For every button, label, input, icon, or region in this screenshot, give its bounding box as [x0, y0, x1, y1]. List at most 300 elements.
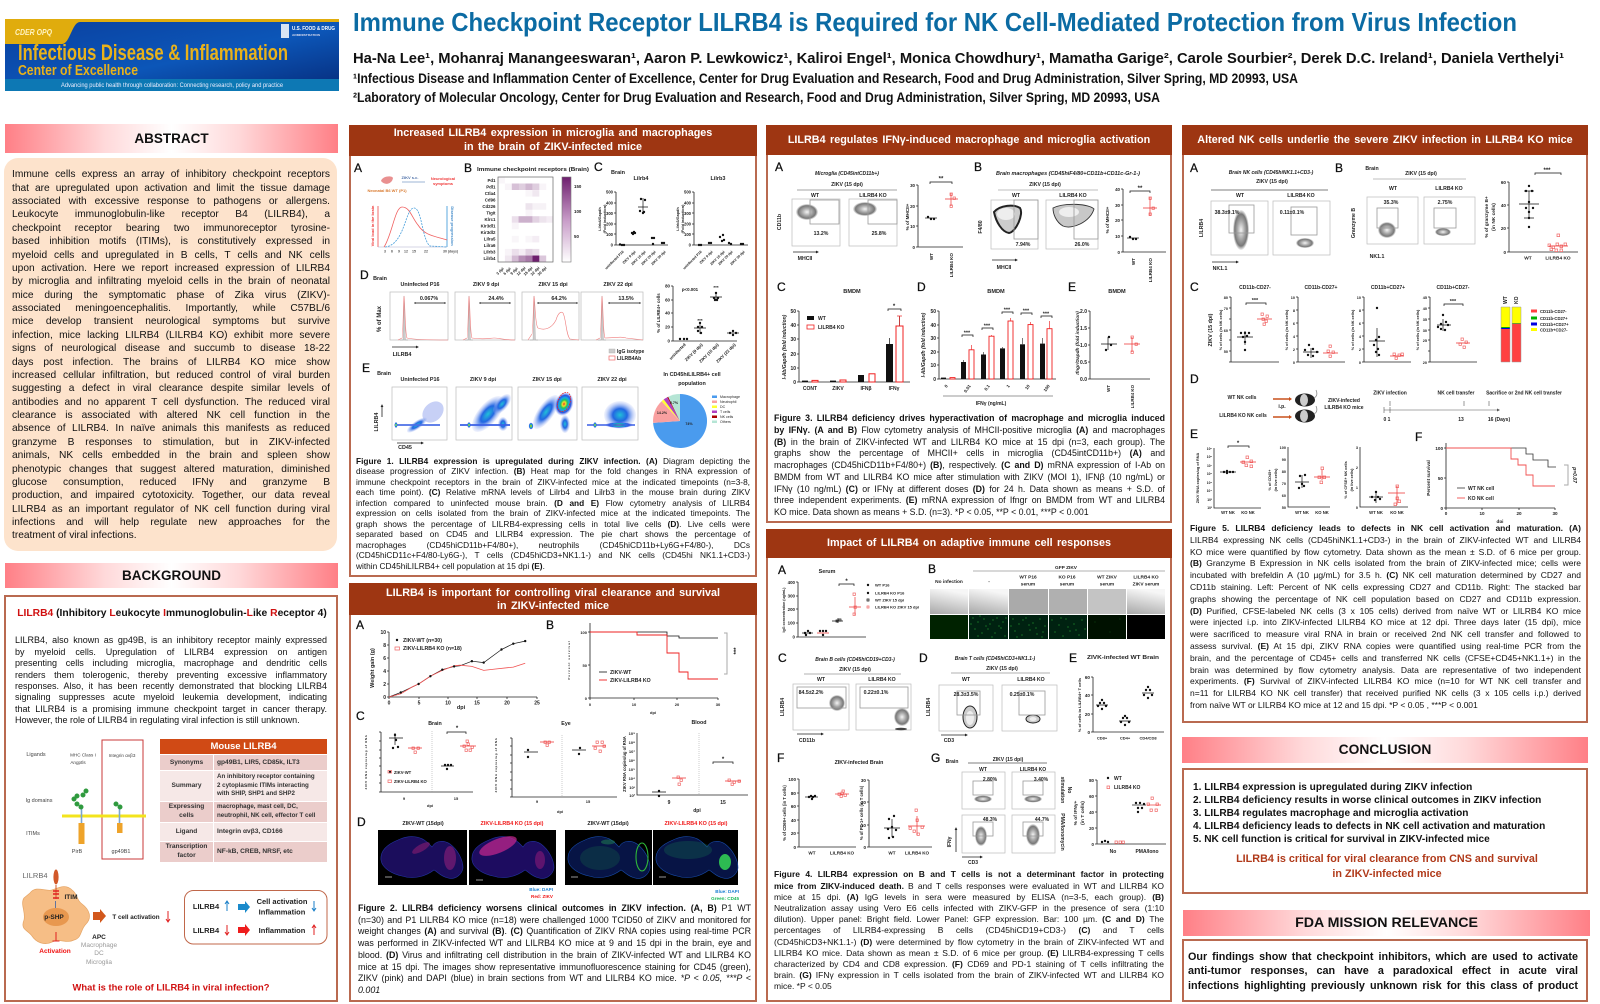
- F: CD69 and PD-1 scatter plots: 0: [863, 845, 866, 850]
- E: CD45 vs LILRB4 density plots: CD45: [398, 445, 412, 451]
- A: microglia flow plots and scatter: [775, 160, 963, 277]
- A: serum IgG scatter: *: [845, 579, 848, 585]
- B: neutralization microscopy grid: [928, 562, 1165, 639]
- C: NK subset scatter plots and stacked bars: 20: [1423, 361, 1427, 365]
- D: brain T cell flow plots: WT: [962, 677, 971, 683]
- C: brain B cell flow plots: WT: [817, 677, 826, 683]
- C: NK subset scatter plots and stacked bars: 0: [1359, 361, 1361, 365]
- receptor structure diagram: Ig domains: [26, 798, 53, 804]
- B: survival curve: Percent survival: [567, 640, 571, 680]
- A: weight gain line chart: Weight gain (g): [370, 648, 376, 688]
- text block: background paragraph: LILRB4, also known as gp49B, is an inhibitory receptor mainly expressed: [15, 635, 327, 645]
- callout: key conclusion: LILRB4 is critical for viral clearance from CNS and survival: [1236, 852, 1538, 864]
- text block: abstract: granzyme B responses to stimulation, but in ZIKV-infected: [12, 437, 330, 448]
- G: IFN gamma flow plots and scatter: 3.40%: [1034, 777, 1049, 783]
- C: brain B cell flow plots: CD11b: [799, 738, 815, 744]
- E: Ifngr scatter: 1.5: [1080, 326, 1087, 332]
- figure 2 charts: [356, 618, 748, 901]
- C: ZIKV RNA scatter plots: 9: [536, 799, 539, 804]
- caption: figure 4: percentages of LILRB4-expressing B cells (CD45hiCD19+CD3-) (C) and T cells: [774, 925, 1164, 935]
- heading: FDA mission relevance: FDA MISSION RELEVANCE: [1295, 915, 1478, 931]
- E: viral RNA and transferred cell scatter plots: % of CD45+: [1268, 469, 1272, 490]
- B: brain macrophage flow plots and scatter: % of MHCII+: [1105, 206, 1110, 233]
- D: immunofluorescence brain sections: [357, 815, 739, 901]
- B: survival curve: 20: [675, 702, 680, 707]
- C: Lilrb4 and Lilrb3 mRNA charts: ZIKV 30 dpi: [729, 250, 746, 266]
- C: NK subset scatter plots and stacked bars: % of cells (in NK cells): [1285, 309, 1289, 350]
- D: percent LILRB4 positive scatter: p<0.001: [682, 287, 699, 292]
- A: weight gain line chart: A: [356, 618, 364, 632]
- B: heat map: Kir3dl1: [481, 224, 496, 228]
- caption: figure 5: were injected i.p. into ZIKV-infected LILRB4 KO mice at 12 dpi. Three days later (15 dpi), mice: [1190, 617, 1581, 627]
- text block: abstract: associated meningoencephalitis. Importantly, while C57BL/6: [12, 303, 330, 314]
- heading: figure 2 panel: in ZIKV-infected mice: [497, 600, 609, 612]
- C: NK subset scatter plots and stacked bars: 6: [1359, 322, 1361, 326]
- C: BMDM bar chart: ZIKV: [832, 386, 844, 392]
- D: IFN gamma dose bar chart: ***: [964, 330, 971, 336]
- B: heat map: Klrc1: [485, 217, 496, 222]
- C: BMDM bar chart: *: [893, 304, 896, 310]
- E: viral RNA and transferred cell scatter plots: (in live cells): [1350, 468, 1354, 491]
- APC signalling diagram: Activation: [39, 948, 71, 955]
- C: brain B cell flow plots: ZIKV (15 dpi): [839, 667, 871, 673]
- E: viral RNA and transferred cell scatter plots: WT NK: [1369, 510, 1383, 515]
- G: IFN gamma flow plots and scatter: 48.3%: [983, 817, 998, 823]
- caption: figure 4: characterized by CD4 and CD8 expression. (F) CD69 and PD-1 staining of T cells infiltrating the: [774, 959, 1164, 969]
- text block: abstract: checkpoint receptor bearing two immunoreceptor tyrosine-: [12, 223, 330, 234]
- B: heat map: 22 dpi: [530, 266, 541, 277]
- A: microglia flow plots and scatter: 20: [910, 204, 916, 209]
- E: viral RNA and transferred cell scatter plots: *: [1237, 441, 1240, 447]
- caption: figure 1: macrophages (CD45hiCD11b+F4/80+), neutrophils (CD45hiCD11b+Ly6G+F4/80-), DCs: [356, 540, 750, 550]
- D: NK transfer schematic and timeline: D: [1190, 372, 1199, 386]
- C: Lilrb4 and Lilrb3 mRNA charts: 300: [684, 211, 692, 216]
- E: viral RNA and transferred cell scatter plots: 10⁸: [1207, 455, 1212, 459]
- F: CD69 and PD-1 scatter plots: WT: [808, 850, 816, 856]
- heading: conclusion: [1182, 737, 1588, 763]
- caption: figure 2: blood. (D) Virus and infiltrating cell distribution in the brain of ZIKV-infected WT and LILRB4 KO: [358, 950, 751, 960]
- B: neutralization microscopy grid: WT ZIKV: [1097, 574, 1118, 580]
- B: heat map: Immune checkpoint receptors (Brain): [477, 167, 589, 173]
- text block: abstract: mice develop transient neurological symptoms but survive: [12, 316, 330, 327]
- E: T cell subset scatter: CD4/CD8: [1139, 736, 1157, 740]
- C: NK subset scatter plots and stacked bars: 8: [1359, 309, 1361, 313]
- D: brain T cell flow plots: ZIKV (15 dpi): [986, 666, 1018, 672]
- C: BMDM bar chart: 20: [790, 352, 796, 358]
- B: granzyme B flow plots and scatter: WT: [1524, 256, 1532, 262]
- A: serum IgG scatter: 400: [788, 580, 796, 585]
- panel: figure 3 IFN gamma activation: [766, 125, 1172, 523]
- C: Lilrb4 and Lilrb3 mRNA charts: ZIKV 20 dpi: [640, 250, 657, 266]
- E: T cell subset scatter: E: [1069, 651, 1077, 665]
- C: NK subset scatter plots and stacked bars: 40: [1423, 307, 1427, 311]
- G: IFN gamma flow plots and scatter: 2.80%: [983, 777, 998, 783]
- caption: figure 3: by IFNγ. (A and B) Flow cytometry analysis of MHCII-positive microglia (A) and macrophages: [774, 425, 1165, 435]
- text block: background paragraph: renders them tolerogenic, thereby preventing excessive inflammatory: [15, 670, 327, 680]
- E: viral RNA and transferred cell scatter plots: KO NK: [1390, 510, 1404, 515]
- B: survival curve: 0: [585, 696, 588, 701]
- C: NK subset scatter plots and stacked bars: CD11b-CD27-: [1540, 309, 1567, 314]
- APC signalling diagram: p-SHP: [44, 914, 64, 921]
- caption: figure 2: was performed in ZIKV-infected WT and LILRB4 KO mice at 9 and 15 dpi in the brain, eye and: [358, 938, 751, 948]
- G: IFN gamma flow plots and scatter: 44.7%: [1035, 817, 1050, 823]
- C: ZIKV RNA scatter plots: 15: [586, 799, 591, 804]
- C: ZIKV RNA scatter plots: C: [356, 709, 365, 723]
- text block: FDA relevance: Our findings show that checkpoint inhibitors, which are used to activate: [1188, 950, 1578, 962]
- C: NK subset scatter plots and stacked bars: 4: [1359, 335, 1362, 339]
- A: microglia flow plots and scatter: MHCII: [798, 256, 813, 262]
- D: percent LILRB4 positive scatter: 40: [665, 310, 671, 316]
- D: IFN gamma dose bar chart: I-Ab/Gapdh (fold induction): [921, 312, 927, 377]
- C: Lilrb4 and Lilrb3 mRNA charts: 200: [606, 222, 614, 226]
- C: BMDM bar chart: 40: [790, 323, 796, 329]
- caption: figure 1: expression on cells isolated from the brain of ZIKV-infected mice at the indicated timepoints. The: [356, 508, 750, 518]
- C: NK subset scatter plots and stacked bars: 10: [1291, 296, 1295, 300]
- C: Lilrb4 and Lilrb3 mRNA charts: ZIKV 15 dpi: [709, 250, 726, 266]
- B: heat map: Ctla4: [485, 191, 496, 196]
- text block: abstract: treatment of viral infections.: [12, 530, 137, 541]
- caption: figure 4: dilution). Upper panel: Bright field. Lower Panel: GFP expression. Bar: 100 µm. (C and D) The: [774, 914, 1164, 924]
- table: mouse LILRB4: Transcription: [166, 843, 207, 850]
- C: NK subset scatter plots and stacked bars: CD11b-CD27+: [1540, 316, 1568, 321]
- A: NK LILRB4 flow plots: A: [1190, 161, 1198, 175]
- E: pie chart of cell population: Others: [720, 420, 731, 424]
- D: NK transfer schematic and timeline: 16 (Days): [1488, 417, 1510, 423]
- G: IFN gamma flow plots and scatter: WT: [1114, 776, 1122, 782]
- F: CD69 and PD-1 scatter plots: 20: [861, 800, 866, 805]
- F: CD69 and PD-1 scatter plots: 20: [791, 831, 796, 836]
- caption: figure 1: within CD45hiLILRB4+ cell population at 15 dpi (E).: [356, 561, 545, 571]
- C: Lilrb4 and Lilrb3 mRNA charts: ZIKV 30 dpi: [650, 250, 667, 266]
- D: NK transfer schematic and timeline: WT NK cells: [1228, 395, 1257, 401]
- D: percent LILRB4 positive scatter: ZIKV (9 dpi): [684, 342, 704, 362]
- caption: figure 2: 0.001: [358, 985, 380, 995]
- B: survival curve: 100: [580, 630, 588, 635]
- C: ZIKV RNA scatter plots: Blood: [691, 720, 707, 726]
- B: brain macrophage flow plots and scatter: 0: [1118, 250, 1121, 255]
- B: heat map: 30 dpi: [537, 266, 548, 277]
- A: microglia flow plots and scatter: 25.8%: [872, 231, 887, 237]
- E: CD45 vs LILRB4 density plots: Uninfected P16: [401, 377, 439, 383]
- G: IFN gamma flow plots and scatter: G: [931, 751, 940, 765]
- B: granzyme B flow plots and scatter: 20: [1501, 226, 1506, 231]
- B: neutralization microscopy grid: GFP ZIKV: [1055, 565, 1078, 571]
- E: CD45 vs LILRB4 density plots: ZIKV 22 dpi: [597, 377, 627, 383]
- A: disease progression diagram: A: [354, 161, 362, 175]
- G: IFN gamma flow plots and scatter: (in T cells): [1080, 801, 1086, 825]
- D: immunofluorescence brain sections: ZIKV-WT (15dpi): [587, 821, 629, 827]
- C: ZIKV RNA scatter plots: Eye: [561, 721, 571, 727]
- caption: figure 4: (CD45hiCD3+NK1.1-) (D) were determined by flow cytometry in the brain of ZIKV-infected WT and: [774, 937, 1164, 947]
- C: Lilrb4 and Lilrb3 mRNA charts: 0: [689, 242, 692, 248]
- B: survival curve: ZIKV-WT: [610, 670, 632, 676]
- B: granzyme B flow plots and scatter: B: [1335, 161, 1343, 175]
- D: percent LILRB4 positive scatter: ZIKV (15 dpi): [698, 342, 720, 364]
- table: mouse LILRB4: cells: [179, 812, 194, 819]
- G: IFN gamma flow plots and scatter: 20: [1089, 826, 1095, 831]
- affiliation 1: ¹Infectious Disease and Inflammation Center of Excellence, Center for Drug Evaluation and Research, Food and Drug Administration, Silver Spring, MD 20993, USA: [353, 70, 1298, 86]
- A: disease progression diagram: [354, 161, 458, 254]
- D: percent LILRB4 positive scatter: uninfected: [668, 342, 687, 361]
- G: IFN gamma flow plots and scatter: IFNγ: [947, 836, 953, 847]
- E: pie chart of cell population: 74%: [685, 422, 693, 426]
- caption: figure 2: (n=30) and P1 LILRB4 KO mice (n=18) were challenged 1000 TCID50 of ZIKV and monitored for: [358, 915, 751, 925]
- E: Ifngr scatter: LILRB4 KO: [1130, 384, 1135, 408]
- text block: FDA relevance: infections highlighting previously unknown risk for this class of product: [1188, 980, 1578, 992]
- E: viral RNA and transferred cell scatter plots: 70: [1282, 482, 1286, 486]
- diagrams: receptor structure and signalling: [22, 740, 328, 992]
- F: CD69 and PD-1 scatter plots: 40: [791, 818, 796, 823]
- A: microglia flow plots and scatter: 13.2%: [814, 231, 829, 237]
- caption: figure 5: experiments. (F) Survival of ZIKV-infected LILRB4 KO mice (n=10 for WT NK cell transfer and: [1190, 676, 1581, 686]
- A: microglia flow plots and scatter: CD11b: [777, 214, 783, 230]
- B: heat map: Lilrb3: [484, 250, 496, 254]
- D: IFN gamma dose bar chart: 1: [1005, 383, 1011, 389]
- A: NK LILRB4 flow plots: 38.3±9.1%: [1215, 210, 1240, 216]
- receptor structure diagram: MHC Class I: [70, 752, 96, 758]
- C: NK subset scatter plots and stacked bars: 4: [1293, 335, 1296, 339]
- E: viral RNA and transferred cell scatter plots: [1190, 427, 1408, 515]
- C: Lilrb4 and Lilrb3 mRNA charts: ZIKV 20 dpi: [717, 250, 734, 266]
- G: IFN gamma flow plots and scatter: PMA/Ionomycin: [1059, 813, 1065, 851]
- A: microglia flow plots and scatter: 10: [910, 224, 916, 229]
- caption: figure 2: Figure 2. LILRB4 deficiency worsens clinical outcomes in ZIKV infection. (A, B) P1 WT: [358, 903, 751, 913]
- D: NK transfer schematic and timeline: Sacrifice or 2nd NK cell transfer: [1486, 390, 1562, 396]
- B: heat map: Pd1: [487, 178, 496, 183]
- D: LILRB4 histograms: ZIKV 15 dpi: [538, 282, 568, 288]
- E: pie chart of cell population: DC: [720, 405, 726, 409]
- caption: figure 5: from naïve WT or LILRB4 KO mice at 12 and 15 dpi. *P < 0.05 , ***P < 0.001: [1190, 700, 1478, 710]
- text block: abstract: signs of neurological disease and succumb to disease 18-22: [12, 343, 330, 354]
- D: immunofluorescence brain sections: ZIKV-LILRB4 KO (15 dpi): [481, 821, 544, 827]
- table: mouse LILRB4: macrophage, mast cell, DC,: [217, 803, 298, 810]
- C: BMDM bar chart: 50: [790, 309, 796, 315]
- B: brain macrophage flow plots and scatter: 7.94%: [1016, 242, 1031, 248]
- text block: FDA relevance: [1188, 950, 1578, 992]
- G: IFN gamma flow plots and scatter: PMA/Iono: [1135, 849, 1159, 855]
- G: IFN gamma flow plots and scatter: CD3: [968, 860, 978, 866]
- B: survival curve: 10: [632, 702, 637, 707]
- D: NK transfer schematic and timeline: LILRB4 KO NK cells: [1219, 413, 1267, 419]
- B: granzyme B flow plots and scatter: LILRB4 KO: [1435, 186, 1463, 192]
- E: CD45 vs LILRB4 density plots: E: [362, 361, 370, 375]
- receptor structure diagram: [26, 740, 146, 859]
- E: CD45 vs LILRB4 density plots: LILRB4: [374, 413, 380, 431]
- B: survival curve: dpi: [650, 710, 656, 715]
- A: weight gain line chart: 25: [534, 700, 540, 706]
- text block: abstract: mice during the symptomatic phase of Zika virus (ZIKV)-: [12, 290, 330, 301]
- A: weight gain line chart: 0: [388, 700, 391, 706]
- D: percent LILRB4 positive scatter: ZIKV (22 dpi): [715, 342, 737, 364]
- E: viral RNA and transferred cell scatter plots: 10⁵: [1207, 481, 1212, 485]
- C: NK subset scatter plots and stacked bars: 45: [1423, 296, 1427, 300]
- C: NK subset scatter plots and stacked bars: ***: [1252, 298, 1259, 304]
- text block: abstract: infection, mice lacking LILRB4 (LILRB4 KO) exhibit more severe: [12, 330, 330, 341]
- C: NK subset scatter plots and stacked bars: KO: [1514, 296, 1520, 304]
- F: NK transfer survival curve: 50: [1438, 476, 1443, 481]
- table: mouse LILRB4: gp49B1, LIR5, CD85k, ILT3: [217, 759, 300, 766]
- C: ZIKV RNA scatter plots: ZIKV RNA copies/ug of RNA: [622, 736, 627, 792]
- C: NK subset scatter plots and stacked bars: 60: [1224, 329, 1228, 333]
- APC signalling diagram: LILRB4: [22, 871, 48, 880]
- E: viral RNA and transferred cell scatter plots: KO NK: [1241, 510, 1255, 515]
- APC signalling diagram: DC: [94, 950, 104, 957]
- A: weight gain line chart: 20: [504, 700, 510, 706]
- D: IFN gamma dose bar chart: IFNγ (ng/mL): [976, 401, 1007, 407]
- C: NK subset scatter plots and stacked bars: 10: [1357, 296, 1361, 300]
- C: BMDM bar chart: IFNβ: [860, 386, 872, 392]
- A: serum IgG scatter: Serum: [819, 569, 836, 575]
- C: Lilrb4 and Lilrb3 mRNA charts: uninfected P16: [682, 250, 703, 270]
- E: Ifngr scatter: 2.0: [1080, 309, 1087, 315]
- text block: abstract: associated with excessive response to pathogens or allergens.: [12, 196, 330, 207]
- A: weight gain line chart: ZIKV-WT (n=30): [403, 638, 442, 644]
- C: ZIKV RNA scatter plots: [356, 709, 748, 814]
- authors: Ha-Na Lee¹, Mohanraj Manangeeswaran¹, Aaron P. Lewkowicz¹, Kaliroi Engel¹, Monica Chowdhury¹, Mamatha Garige², Carole Sourbier², Derek D.C. Ireland¹, Daniela Verthelyi¹: [353, 51, 1564, 67]
- F: CD69 and PD-1 scatter plots: LILRB4 KO: [905, 850, 930, 856]
- caption: figure 5: assess survival. (E) At 15 dpi, ZIKV RNA copies were quantified using real-time PCR from the: [1190, 641, 1581, 651]
- F: CD69 and PD-1 scatter plots: 10: [861, 823, 866, 828]
- D: NK transfer schematic and timeline: LILRB4 KO mice: [1324, 405, 1364, 411]
- A: weight gain line chart: 10: [380, 630, 386, 636]
- text block: abstract: phenotypic changes that suggest altered maturation, diminished: [12, 464, 330, 475]
- C: NK subset scatter plots and stacked bars: 80: [1224, 296, 1228, 300]
- text block: abstract: animals, NK cells embedded in the brain and spleen show: [12, 450, 330, 461]
- F: CD69 and PD-1 scatter plots: LILRB4 KO: [830, 850, 855, 856]
- heading: abstract: [5, 124, 338, 153]
- heading: figure 5 panel: Altered NK cells underlie the severe ZIKV infection in LILRB4 KO mice: [1197, 134, 1573, 146]
- A: serum IgG scatter: WT P16: [875, 582, 890, 588]
- D: IFN gamma dose bar chart: 50: [930, 309, 936, 315]
- text block: background paragraph: responses. Also, it has been recently demonstrated that blocking LILRB4: [15, 681, 327, 691]
- C: NK subset scatter plots and stacked bars: % of cells (in NK cells): [1219, 309, 1223, 350]
- G: IFN gamma flow plots and scatter: stimulation: [1059, 777, 1065, 803]
- A: weight gain line chart: 10: [445, 700, 451, 706]
- B: brain macrophage flow plots and scatter: 40: [1115, 187, 1121, 192]
- C: Lilrb4 and Lilrb3 mRNA charts: Lilrb3: [711, 176, 725, 182]
- E: T cell subset scatter: CD8+: [1097, 736, 1108, 740]
- C: ZIKV RNA scatter plots: dpi: [427, 803, 433, 808]
- A: serum IgG scatter: 200: [788, 607, 796, 612]
- APC signalling diagram: T cell activation: [112, 914, 160, 921]
- C: Lilrb4 and Lilrb3 mRNA charts: Lilrb4/Gapdh: [598, 207, 602, 231]
- C: NK subset scatter plots and stacked bars: CD11b+CD27+: [1540, 322, 1569, 327]
- caption: figure 3: (B) in the brain of ZIKV-infected WT and LILRB4 KO mice at 15 dpi (n=3, each group). The: [774, 436, 1165, 446]
- heading: figure 2 panel: [349, 583, 757, 615]
- A: weight gain line chart: 2: [383, 682, 386, 688]
- C: brain B cell flow plots: [778, 651, 911, 744]
- caption: figure 4: mice. *P < 0.05: [774, 981, 832, 991]
- D: NK transfer schematic and timeline: 13: [1458, 417, 1464, 423]
- caption: figure 5: [1190, 523, 1581, 710]
- A: NK LILRB4 flow plots: Brain NK cells (CD45hiNK1.1+CD3-): [1229, 170, 1314, 176]
- list: conclusion points: 4. LILRB4 deficiency leads to defects in NK cell activation and maturation: [1193, 820, 1545, 832]
- caption: figure 5: KO mice were quantified by flow cytometry. Data shown as the mean ± S.D. of 6 mice per group.: [1190, 547, 1581, 557]
- A: NK LILRB4 flow plots: LILRB4 KO: [1287, 193, 1315, 199]
- E: Ifngr scatter: 0.5: [1080, 360, 1087, 366]
- A: disease progression diagram: ZIKV s.c.: [402, 175, 418, 180]
- B: heat map: [464, 161, 589, 277]
- C: NK subset scatter plots and stacked bars: [1190, 280, 1569, 365]
- C: BMDM bar chart: 0: [793, 380, 796, 386]
- D: LILRB4 histograms: LILRB4: [393, 352, 411, 358]
- A: NK LILRB4 flow plots: ZIKV (15 dpi): [1256, 179, 1288, 185]
- A: weight gain line chart: 6: [383, 656, 386, 662]
- B: granzyme B flow plots and scatter: ZIKV (15 dpi): [1405, 171, 1437, 177]
- C: ZIKV RNA scatter plots: ZIKV-LILRB4 KO: [394, 779, 428, 784]
- D: IFN gamma dose bar chart: 0.1: [983, 383, 991, 392]
- E: CD45 vs LILRB4 density plots: ZIKV 15 dpi: [532, 377, 562, 383]
- list: conclusion points: [1193, 782, 1545, 844]
- table: mouse LILRB4: An inhibitory receptor containing: [217, 773, 315, 780]
- E: Ifngr scatter: Ifngr/Gapdh (fold induction): [1075, 311, 1081, 375]
- B: brain macrophage flow plots and scatter: ZIKV (15 dpi): [1029, 182, 1061, 188]
- panel: figure 5 NK cells: [1182, 125, 1588, 723]
- E: T cell subset scatter: [1069, 651, 1164, 740]
- C: Lilrb4 and Lilrb3 mRNA charts: 300: [606, 211, 614, 216]
- C: NK subset scatter plots and stacked bars: 2: [1293, 348, 1295, 352]
- D: percent LILRB4 positive scatter: 20: [665, 324, 671, 330]
- C: brain B cell flow plots: Brain B cells (CD45hiCD19+CD3-): [815, 657, 895, 663]
- B: heat map: 150: [574, 184, 582, 189]
- caption: figure 2: ZIKV (pink) and DAPI (blue) in brain sections from WT and LILRB4 KO mice. *P < 0.05, ***P <: [358, 973, 751, 983]
- A: disease progression diagram: 22: [424, 250, 428, 254]
- A: serum IgG scatter: 100: [788, 620, 796, 626]
- logo banner: Infectious Disease and Inflammation Center of Excellence: ADMINISTRATION: [292, 33, 320, 37]
- F: NK transfer survival curve: 30: [1552, 511, 1558, 516]
- C: BMDM bar chart: 10: [790, 366, 796, 372]
- B: granzyme B flow plots and scatter: 60: [1501, 180, 1506, 185]
- F: CD69 and PD-1 scatter plots: F: [777, 751, 784, 765]
- E: pie chart of cell population: T cells: [720, 410, 731, 414]
- D: percent LILRB4 positive scatter: 80: [665, 284, 671, 288]
- E: viral RNA and transferred cell scatter plots: 50: [1282, 506, 1286, 510]
- caption: figure 5: brain, and the percentage of CD45+ cells and transferred NK cells (CFSE+CD45+NK1.1+) in the: [1190, 653, 1581, 663]
- F: CD69 and PD-1 scatter plots: % of CD69+ cells (in T cells): [782, 785, 787, 841]
- E: Ifngr scatter: 1.0: [1080, 343, 1087, 349]
- E: viral RNA and transferred cell scatter plots: 1: [1356, 486, 1358, 490]
- C: BMDM bar chart: 30: [790, 337, 796, 343]
- G: IFN gamma flow plots and scatter: [931, 751, 1166, 866]
- C: NK subset scatter plots and stacked bars: C: [1190, 280, 1199, 294]
- A: serum IgG scatter: 300: [788, 594, 796, 598]
- B: granzyme B flow plots and scatter: ***: [1543, 168, 1551, 174]
- D: immunofluorescence brain sections: Blue: DAPI: [715, 889, 739, 894]
- E: viral RNA and transferred cell scatter plots: E: [1190, 427, 1198, 441]
- E: viral RNA and transferred cell scatter plots: 0: [1356, 506, 1358, 510]
- C: NK subset scatter plots and stacked bars: % of cells (in NK cells): [1416, 309, 1420, 350]
- E: T cell subset scatter: % of cells in LILRB4+ T cells: [1077, 677, 1082, 732]
- caption: figure 5: graphs showing the percentage of NK cell population based on CD27 and CD11b expression.: [1190, 594, 1581, 604]
- D: IFN gamma dose bar chart: 100: [1043, 383, 1051, 393]
- A: microglia flow plots and scatter: Microglia (CD45intCD11b+): [815, 171, 879, 177]
- B: survival curve: 0: [589, 702, 592, 707]
- E: pie chart of cell population: Macrophage: [720, 395, 740, 399]
- B: heat map: Lilrb4: [484, 256, 496, 261]
- table: mouse LILRB4: Summary: [171, 782, 202, 789]
- A: NK LILRB4 flow plots: LILRB4: [1199, 219, 1205, 237]
- E: viral RNA and transferred cell scatter plots: 10³: [1207, 498, 1213, 502]
- E: pie chart of cell population: population: [678, 381, 706, 387]
- B: neutralization microscopy grid: -: [988, 580, 990, 585]
- A: weight gain line chart: 8: [383, 643, 386, 649]
- affiliation 2: ²Laboratory of Molecular Oncology, Center for Drug Evaluation and Research, Food and Drug Administration, Silver Spring, MD 20993, USA: [353, 89, 1160, 105]
- text block: abstract: infections and will help regulate new approaches for the: [12, 517, 330, 528]
- text block: background paragraph: However, the role of LILRB4 in regulating viral infection is still unknown.: [15, 715, 300, 725]
- A: disease progression diagram: symptoms: [433, 181, 454, 186]
- caption: figure 5: were sacrificed to measure viral RNA in brain or received 2nd NK cell transfer and followed to: [1190, 629, 1581, 639]
- A: weight gain line chart: 4: [383, 669, 386, 675]
